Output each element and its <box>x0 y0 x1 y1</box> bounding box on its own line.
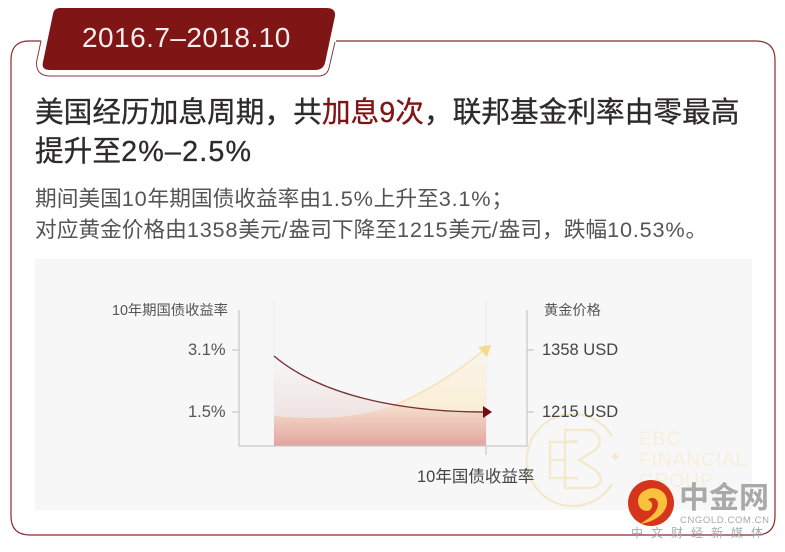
yield arrow <box>274 356 492 418</box>
gold price arrow <box>395 345 491 405</box>
period badge shape <box>43 8 335 70</box>
watermark: EBC Financial Group text <box>639 429 747 492</box>
panel: chart background <box>35 259 752 510</box>
watermark: EBC Financial Group text: EBC <box>639 429 681 450</box>
watermark: EBC Financial Group text: GROUP <box>639 471 714 492</box>
description text: 期间美国10年期国债收益率由1.5%上升至3.1%； <box>35 186 513 211</box>
watermark: diamond: ✦ <box>609 449 622 466</box>
heading: 美国经历加息周期，共加息9次，联邦基金利率由零最高 <box>35 97 739 129</box>
left tick label 1.5%: 1.5% <box>188 403 226 421</box>
description text: 对应黄金价格由1358美元/盎司下降至1215美元/盎司，跌幅10.53%。 <box>35 217 707 242</box>
right tick label 1215 USD: 1215 USD <box>542 403 618 421</box>
right axis title: 黄金价格 <box>544 303 601 319</box>
cngold url: CNGOLD.COM.CN <box>680 515 770 526</box>
period badge text: 2016.7–2018.10 <box>82 22 291 53</box>
left axis title: 10年期国债收益率 <box>112 303 228 319</box>
axes <box>239 310 527 446</box>
cngold slogan: 中文财经新媒体 <box>631 526 771 540</box>
cngold wordmark: 中金网 <box>679 482 769 515</box>
x axis title: 10年国债收益率 <box>417 468 534 486</box>
heading <box>35 97 739 168</box>
watermark: EBC Financial Group text: FINANCIAL <box>639 450 747 471</box>
description text <box>35 186 707 242</box>
right tick label 1358 USD: 1358 USD <box>542 341 618 359</box>
heading: 提升至2%–2.5% <box>35 136 252 168</box>
left tick label 3.1%: 3.1% <box>188 341 226 359</box>
